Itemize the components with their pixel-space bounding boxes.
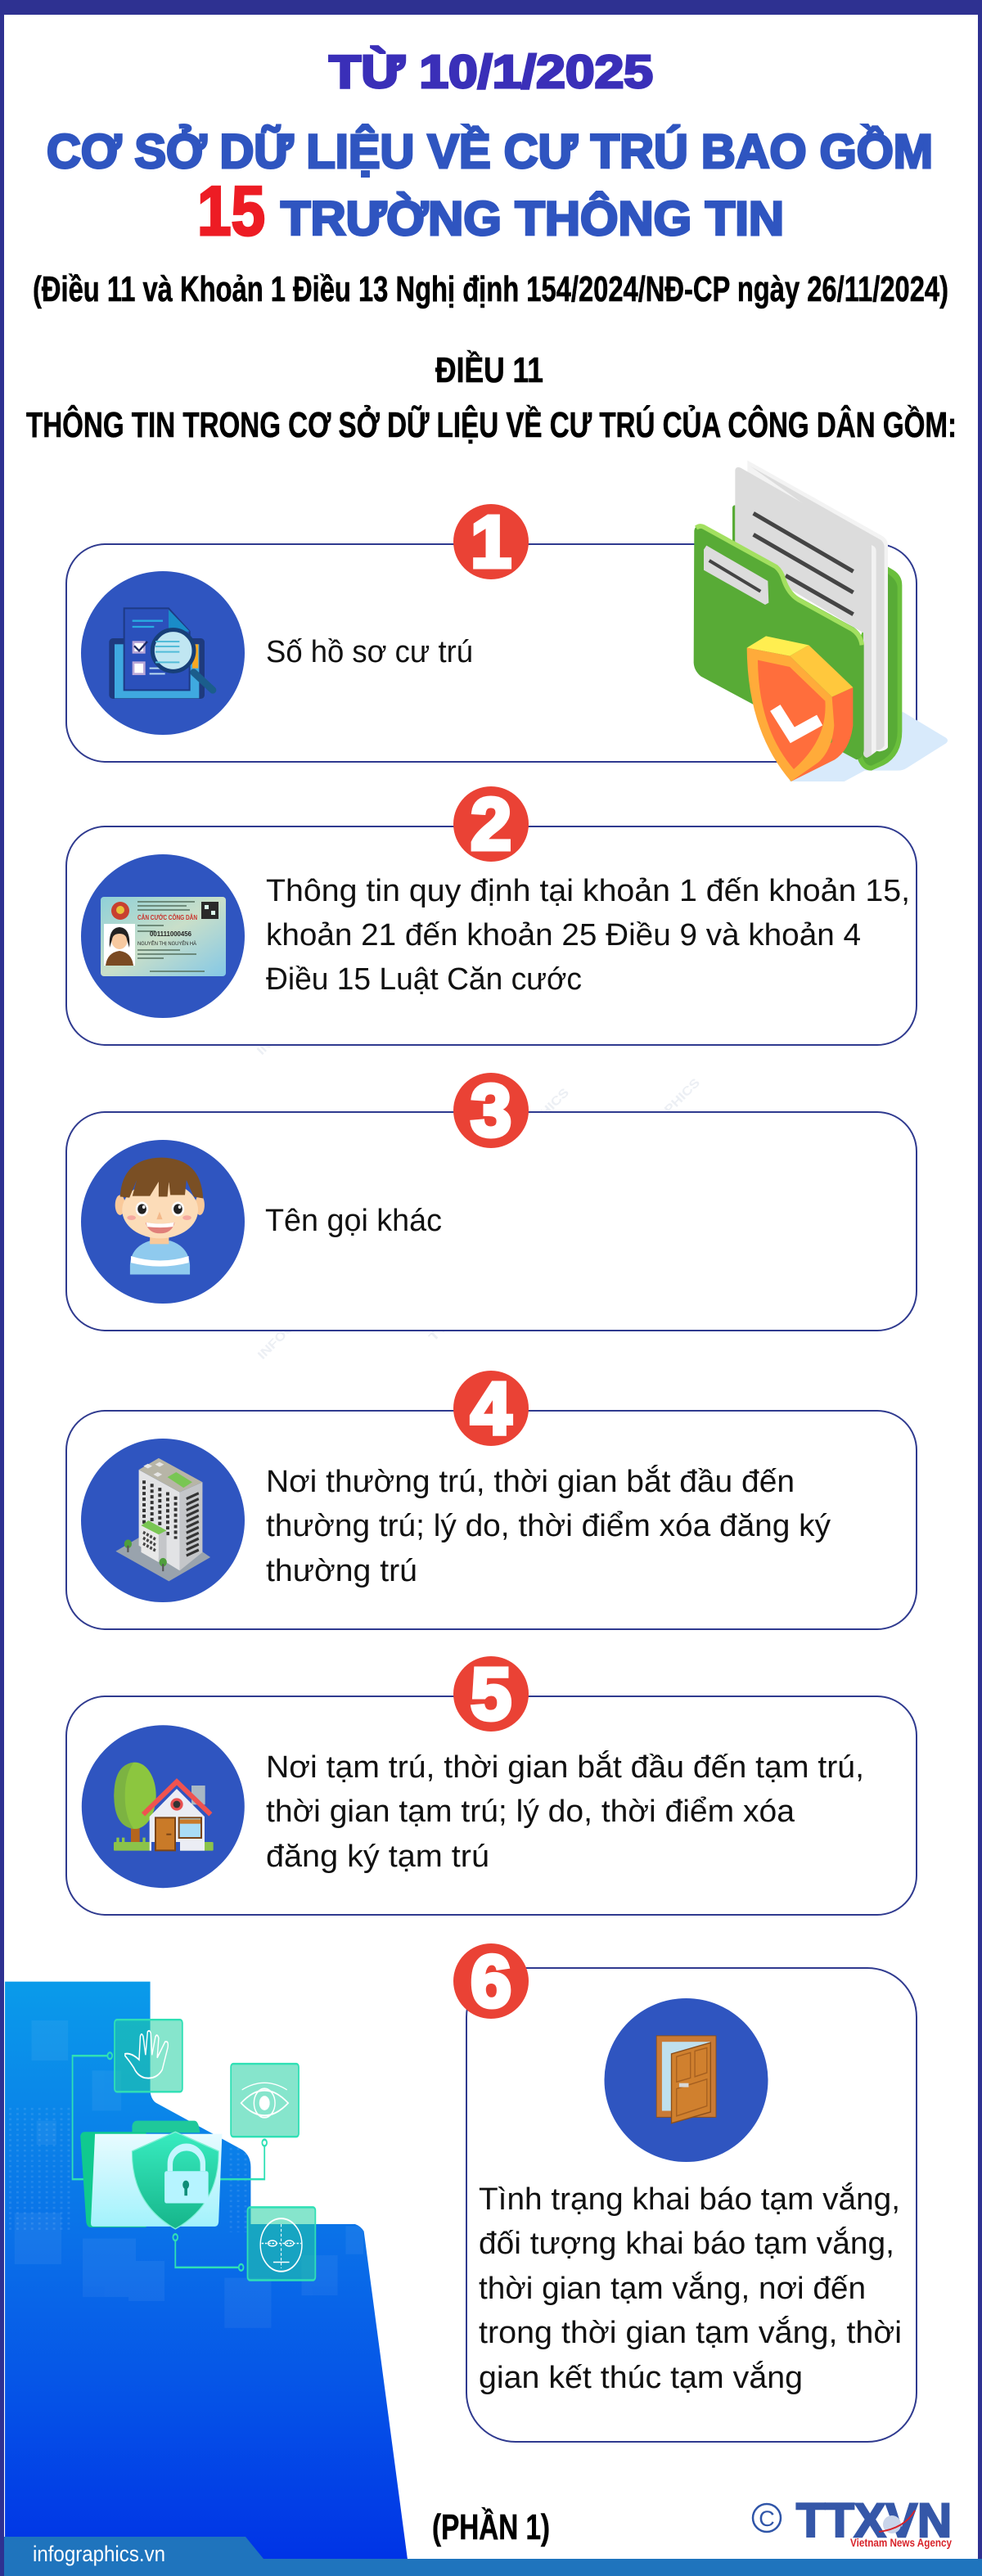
text: item 6 — [479, 2182, 902, 2395]
icon: folder and lock shield — [80, 2121, 222, 2229]
panel: item 4 — [66, 1368, 917, 1629]
text: item 3: Tên gọi khác — [265, 1204, 442, 1238]
section heading: ĐIỀU 11 — [435, 349, 543, 390]
watermarks: INFOGRAPHICS — [402, 1452, 490, 1541]
text: item 6: trong thời gian tạm vắng, thời — [479, 2315, 902, 2350]
icon: house — [82, 1725, 245, 1888]
text: item 2: khoản 21 đến khoản 25 Điều 9 và khoản 4 — [266, 918, 861, 952]
logo: TTXVN: Vietnam News Agency — [850, 2536, 952, 2549]
badge: 3: 3 — [471, 1070, 511, 1152]
watermarks: TTXVN – VNA — [271, 1112, 356, 1197]
text: item 4: thường trú — [266, 1554, 417, 1588]
title: CƠ SỞ DỮ LIỆU VỀ CƯ TRÚ BAO GỒM — [47, 125, 933, 178]
icon: fingerprint hand tile — [115, 2020, 182, 2092]
footer band — [0, 2537, 982, 2576]
watermarks — [207, 970, 703, 1557]
text: item 1: Số hồ sơ cư trú — [266, 635, 473, 669]
text: item 6: Tình trạng khai báo tạm vắng, — [479, 2182, 900, 2217]
badge: 2 — [453, 784, 529, 866]
title — [47, 46, 933, 250]
badge: 1 — [453, 502, 529, 583]
badge: 1: 1 — [471, 502, 511, 583]
panel: item 6 — [453, 1941, 917, 2442]
connectors — [73, 2052, 267, 2271]
text: item 6: thời gian tạm vắng, nơi đến — [479, 2271, 866, 2306]
icon: face scan tile — [247, 2207, 315, 2281]
text: item 2: Thông tin quy định tại khoản 1 đến khoản 15, — [266, 874, 910, 908]
text: item 4: Nơi thường trú, thời gian bắt đầu đến — [266, 1464, 795, 1499]
text: item 5: đăng ký tạm trú — [266, 1840, 489, 1874]
title: 15 — [197, 173, 265, 250]
icon: citizen ID card: CĂN CƯỚC CÔNG DÂN — [137, 914, 197, 921]
footer band: infographics.vn — [33, 2542, 165, 2566]
icon: citizen ID card: 001111000456 — [150, 930, 192, 938]
title: TRƯỜNG THÔNG TIN — [281, 192, 784, 245]
badge: 2: 2 — [471, 784, 511, 866]
watermarks: INFOGRAPHICS — [484, 1086, 572, 1174]
watermarks: TTXVN – VNA — [207, 1472, 292, 1557]
text: item 4 — [266, 1464, 831, 1588]
text: item 2: Điều 15 Luật Căn cước — [266, 962, 582, 997]
text: item 6: đối tượng khai báo tạm vắng, — [479, 2226, 894, 2261]
panel: security illustration — [5, 1982, 408, 2560]
icon: door — [604, 1998, 768, 2162]
watermarks: TTXVN – VNA — [426, 1259, 511, 1344]
badge: 4: 4 — [471, 1368, 511, 1450]
badge: 6 — [453, 1941, 529, 2023]
icon: document search — [81, 571, 245, 735]
badge: 5 — [453, 1654, 529, 1736]
panel: item 5 — [66, 1654, 917, 1915]
icon: apartment building — [81, 1439, 245, 1602]
icon: boy — [81, 1140, 245, 1304]
text: item 6: gian kết thúc tạm vắng — [479, 2360, 803, 2395]
panel: item 3 — [66, 1070, 917, 1331]
logo: TTXVN: TTXVN — [796, 2494, 952, 2547]
logo: TTXVN: C — [759, 2506, 775, 2531]
text: item 5: Nơi tạm trú, thời gian bắt đầu đến tạm trú, — [266, 1750, 864, 1785]
icon: citizen ID card — [81, 854, 245, 1018]
badge: 5: 5 — [471, 1654, 511, 1736]
text: item 4: thường trú; lý do, thời điểm xóa đăng ký — [266, 1509, 831, 1543]
watermarks: INFOGRAPHICS — [615, 1076, 703, 1164]
section heading — [26, 349, 957, 445]
text: item 2 — [266, 874, 910, 997]
illustration: folder and shield — [694, 461, 948, 781]
watermarks: INFOGRAPHICS — [255, 970, 343, 1058]
icon: citizen ID card: NGUYỄN THỊ NGUYÊN HÀ — [137, 939, 197, 947]
panel: item 1 — [66, 461, 948, 781]
panel: item 2 — [66, 784, 917, 1045]
badge: 3 — [453, 1070, 529, 1152]
title: TỪ 10/1/2025 — [329, 46, 653, 98]
part label: (PHẦN 1) — [432, 2506, 550, 2547]
badge: 4 — [453, 1368, 529, 1450]
icon: eye tile — [231, 2064, 299, 2137]
text: item 5 — [266, 1750, 864, 1874]
badge: 6: 6 — [471, 1941, 511, 2023]
text: item 5: thời gian tạm trú; lý do, thời điểm xóa — [266, 1795, 795, 1829]
watermarks: INFOGRAPHICS — [255, 1274, 344, 1362]
